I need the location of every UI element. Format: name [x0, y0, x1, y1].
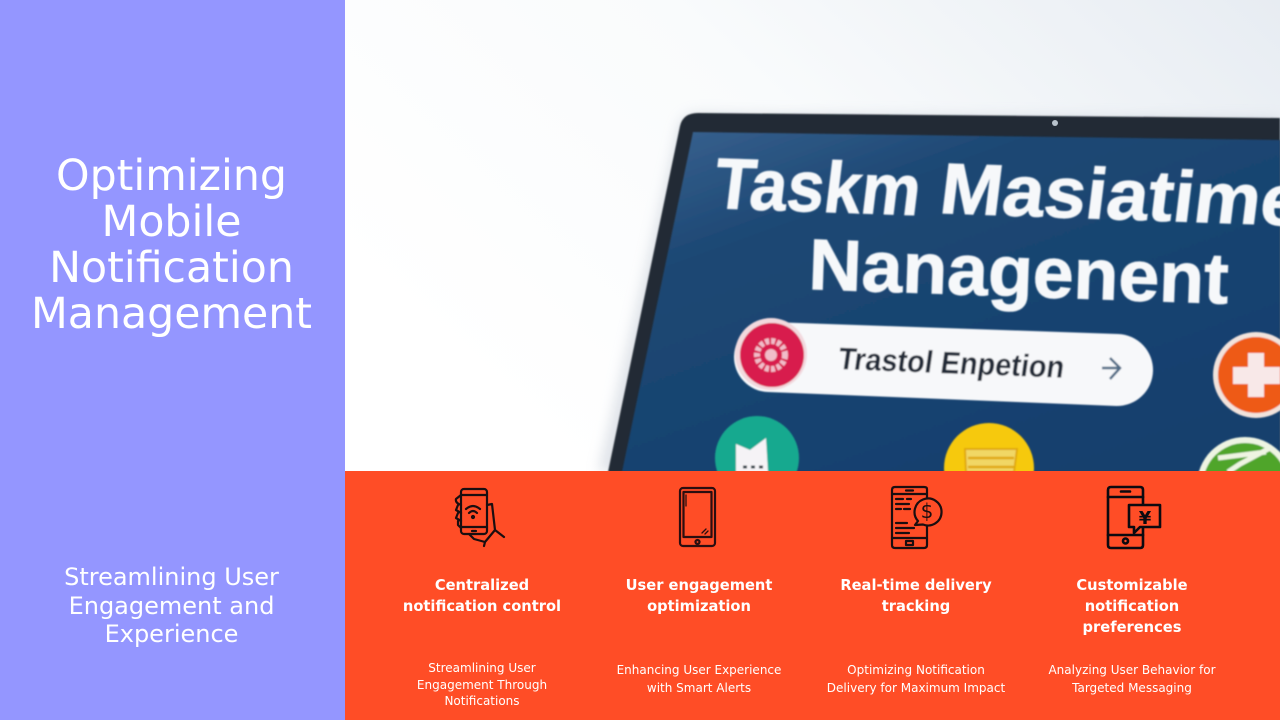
heading	[403, 577, 561, 615]
title	[31, 151, 312, 339]
feature: user engagement optimization	[617, 486, 781, 695]
description	[417, 661, 547, 708]
description: Notifications	[444, 694, 520, 708]
title: Mobile	[102, 197, 241, 247]
heading: optimization	[647, 598, 751, 615]
heading: Centralized	[435, 577, 529, 594]
heading	[626, 577, 772, 615]
icon: phone with dollar bubble: $	[921, 499, 933, 523]
heading: notification	[1085, 598, 1179, 615]
panel: left sidebar	[0, 0, 345, 720]
description: Analyzing User Behavior for	[1048, 663, 1216, 677]
icon: red gear badge	[735, 318, 807, 390]
feature: centralized notification control	[403, 488, 561, 708]
description: Targeted Messaging	[1072, 681, 1192, 695]
description: Delivery for Maximum Impact	[827, 681, 1005, 695]
icon: orange plus	[1213, 332, 1280, 418]
description	[617, 663, 781, 695]
screen heading text: Taskm	[710, 144, 926, 231]
description	[827, 663, 1005, 695]
heading	[840, 577, 992, 615]
icon: phone with dollar bubble	[890, 486, 943, 550]
subtitle: Experience	[105, 620, 238, 648]
icon: arrow	[1102, 358, 1120, 379]
icon: tablet	[678, 486, 716, 548]
tablet body	[598, 113, 1280, 472]
icon: phone with yen bubble	[1106, 486, 1162, 550]
feature: real-time delivery tracking	[827, 486, 1005, 695]
screen pill button: Trastol Enpetion	[836, 341, 1067, 385]
screen heading text: Nanagenent	[807, 225, 1230, 320]
subtitle: Streamlining User	[64, 563, 279, 591]
screen pill button	[734, 318, 1153, 406]
feature: customizable notification preferences	[1048, 486, 1216, 695]
screen app icons	[715, 332, 1280, 533]
description	[1048, 663, 1216, 695]
description: Enhancing User Experience	[617, 663, 781, 677]
screen heading text	[710, 144, 1280, 320]
description: Engagement Through	[417, 678, 547, 692]
heading: Customizable	[1076, 577, 1188, 594]
heading: tracking	[882, 598, 950, 615]
heading: Real-time delivery	[840, 577, 992, 594]
description: Streamlining User	[428, 661, 536, 675]
heading: User engagement	[626, 577, 772, 594]
heading: notification control	[403, 598, 561, 615]
icon: teal badge	[715, 416, 799, 500]
subtitle: Engagement and	[69, 592, 274, 620]
panel: feature band	[345, 471, 1280, 720]
description: with Smart Alerts	[647, 681, 751, 695]
image: notification management tablet photo	[596, 0, 1280, 471]
description: Optimizing Notification	[847, 663, 985, 677]
title: Management	[31, 289, 312, 339]
icon: phone with yen bubble: ¥	[1139, 508, 1152, 529]
heading: preferences	[1083, 619, 1181, 636]
icon: green check badge	[1197, 437, 1280, 533]
title: Notification	[49, 243, 294, 293]
heading	[1076, 577, 1188, 636]
icon: yellow badge	[944, 423, 1034, 513]
title: Optimizing	[56, 151, 287, 201]
icon: hand holding phone with wifi	[454, 488, 506, 548]
subtitle	[64, 563, 279, 648]
